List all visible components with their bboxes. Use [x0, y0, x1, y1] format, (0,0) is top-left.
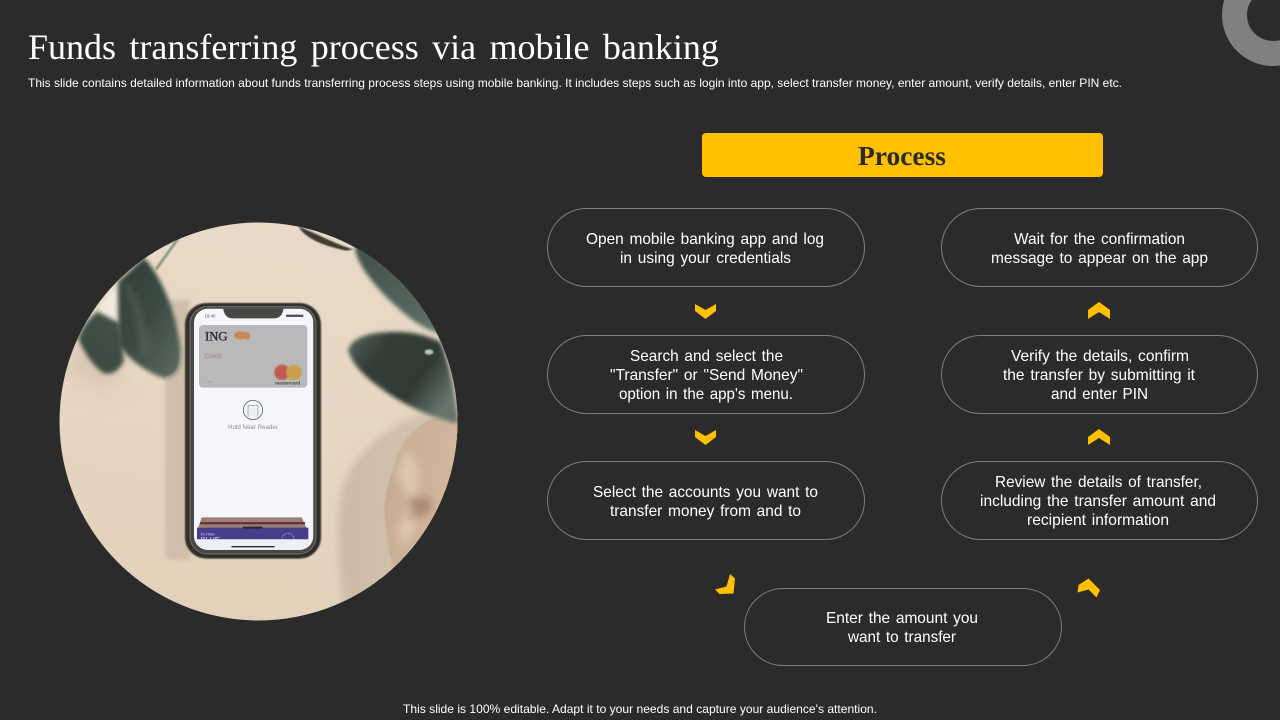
step: review details: including the transfer amount and [980, 493, 1216, 510]
phone status icons [286, 315, 303, 317]
bank card [199, 325, 307, 388]
mastercard label: mastercard [275, 380, 300, 385]
arrow: up 2 [1088, 302, 1110, 319]
step: open app: Open mobile banking app and log [586, 231, 824, 248]
arrow: down 1 [695, 304, 716, 319]
plant stem: left [156, 238, 178, 269]
plant leaf: right [348, 332, 458, 423]
shadow under left leaves [64, 334, 120, 386]
step: review details: recipient information [1027, 512, 1169, 529]
arrow: down 2 [695, 430, 716, 445]
step: wait for confirmation: Wait for the confirmation [1014, 231, 1185, 248]
arrow: down-left to amount [715, 574, 735, 594]
front card name: BLUE [201, 535, 220, 544]
decorative ring: top right corner [1234, 0, 1280, 54]
step: wait for confirmation: message to appear on the app [991, 250, 1208, 267]
phone screen [194, 307, 313, 550]
step: wait for confirmation [942, 208, 1258, 286]
step: verify details [942, 336, 1258, 414]
step: verify details: Verify the details, confirm [1011, 348, 1189, 365]
title: Funds transferring process via mobile banking [28, 27, 719, 67]
front card name: FLYING [201, 531, 215, 536]
process header: Process [858, 140, 946, 171]
card digits: ···· [206, 379, 213, 385]
front card name [200, 533, 294, 540]
reader icon [243, 400, 263, 420]
cork texture patches [397, 450, 432, 547]
step: open app [548, 208, 864, 286]
phone status time: 19:40 [205, 313, 216, 318]
reader caption: Hold Near Reader [228, 424, 278, 431]
front card [197, 528, 308, 539]
mastercard logo [274, 365, 302, 380]
step: search transfer: option in the app's menu. [619, 386, 793, 403]
plant stem: top [298, 227, 353, 251]
photo: phone on beige table inside circle [60, 222, 458, 620]
card brand: ING [205, 329, 227, 343]
step: search transfer: "Transfer" or "Send Money" [610, 367, 803, 384]
process header [702, 133, 1103, 177]
step: verify details: and enter PIN [1051, 386, 1148, 403]
right leaf highlight [425, 349, 433, 355]
plant leaf: upper left [118, 258, 181, 378]
phone notch [223, 308, 284, 318]
lower tray [194, 539, 313, 550]
home indicator [231, 546, 275, 547]
card lion logo [234, 331, 250, 340]
step: select accounts [548, 462, 864, 540]
step: review details [942, 462, 1258, 540]
phone shadow on table [165, 299, 190, 561]
subtitle description: This slide contains detailed information about funds transferring process steps using mobile banking. It includes steps such as login into app, select transfer money, enter amount, verify details, enter PIN etc. [28, 76, 1122, 90]
coaster shadow on table [336, 410, 458, 603]
step: enter amount: Enter the amount you [826, 610, 978, 627]
left leaf rim light [165, 350, 181, 378]
cork coaster [384, 418, 458, 568]
step: enter amount: want to transfer [847, 629, 957, 646]
step: select accounts: Select the accounts you want to [593, 484, 818, 501]
plant leaf: upper right [352, 246, 438, 336]
footer note: This slide is 100% editable. Adapt it to your needs and capture your audience's attention. [403, 702, 877, 716]
step: verify details: the transfer by submitting it [1003, 367, 1196, 384]
card type: Credit [204, 353, 222, 360]
stacked cards [198, 517, 307, 528]
plant leaf: blurred lower left [78, 312, 124, 374]
step: review details: Review the details of transfer, [995, 474, 1202, 491]
arrow: up 1 [1088, 429, 1110, 445]
step: open app: in using your credentials [620, 250, 791, 267]
left leaf vein [125, 285, 147, 353]
step: search transfer: Search and select the [630, 348, 783, 365]
step: select accounts: transfer money from and to [610, 503, 801, 520]
arrow: up-right from amount [1078, 578, 1100, 598]
leaf highlight streak [100, 286, 118, 322]
phone body [185, 303, 321, 559]
step: enter amount [744, 588, 1062, 666]
step: search transfer [548, 336, 864, 414]
